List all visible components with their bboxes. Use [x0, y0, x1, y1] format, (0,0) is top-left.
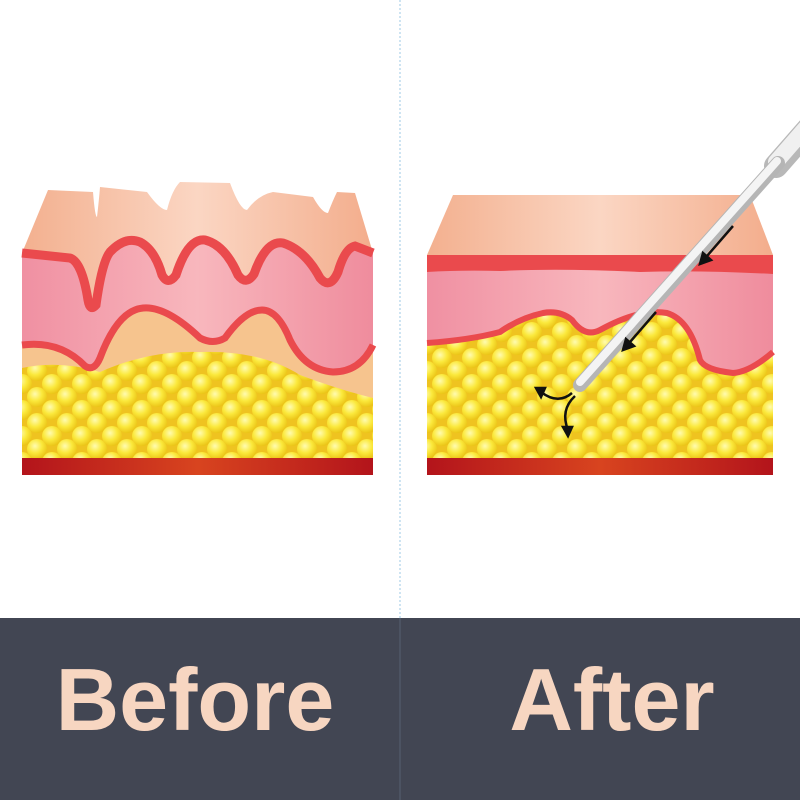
panel: after skin [427, 195, 773, 475]
icon: dispersion arrows [536, 388, 575, 436]
label: Before: Before [56, 650, 334, 749]
bottom banner [0, 618, 800, 800]
dermis [427, 258, 773, 373]
epidermis top flat [427, 195, 773, 255]
fat [22, 352, 373, 460]
epidermis top wrinkled [22, 182, 373, 310]
label: After: After [509, 650, 715, 749]
hypodermis background [22, 300, 373, 460]
panel: before skin [22, 182, 373, 475]
arrows on probe [700, 226, 733, 264]
dermis [22, 240, 373, 372]
icon: cannula probe [580, 108, 800, 385]
fat [427, 300, 773, 460]
